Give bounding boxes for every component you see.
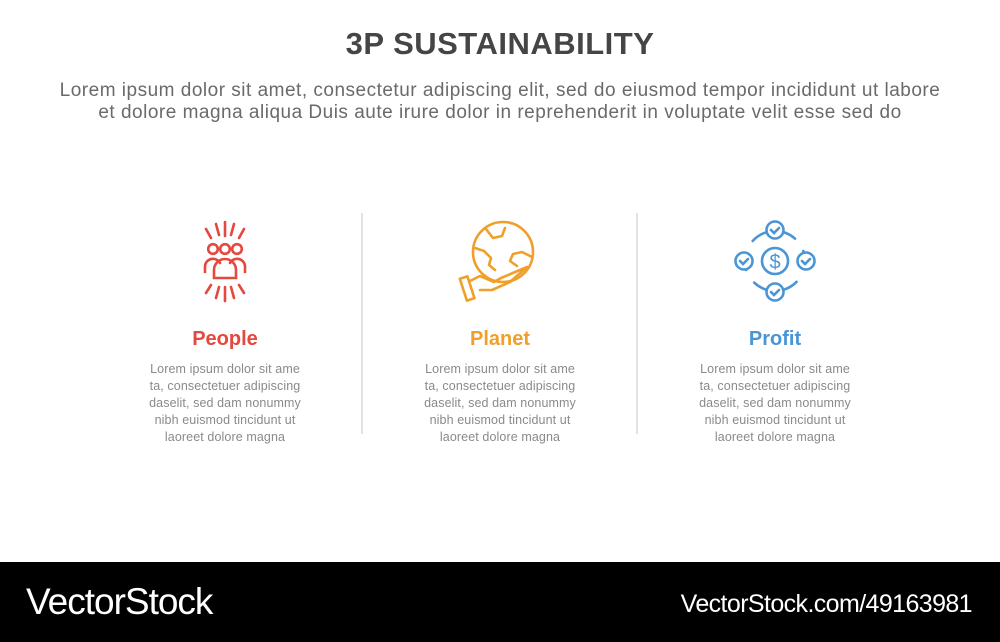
label: Profit <box>749 328 801 350</box>
text: daselit, sed dam nonummy <box>424 396 576 410</box>
text: laoreet dolore magna <box>715 430 835 444</box>
label: People <box>192 328 258 350</box>
text: daselit, sed dam nonummy <box>699 396 851 410</box>
text: laoreet dolore magna <box>165 430 285 444</box>
text: daselit, sed dam nonummy <box>149 396 301 410</box>
text <box>424 362 576 444</box>
text <box>699 362 851 444</box>
text: nibh euismod tincidunt ut <box>430 413 570 427</box>
text: ta, consectetuer adipiscing <box>700 379 850 393</box>
text: Lorem ipsum dolor sit ame <box>700 362 850 376</box>
title: 3P SUSTAINABILITY <box>346 26 654 61</box>
panel: planet <box>424 220 576 444</box>
label: Planet <box>470 328 530 350</box>
footer url: VectorStock.com/49163981 <box>681 590 972 618</box>
panel: profit <box>699 220 851 444</box>
text: nibh euismod tincidunt ut <box>705 413 845 427</box>
icon: people <box>204 220 246 302</box>
icon: profit <box>734 220 816 302</box>
footer <box>0 562 1000 642</box>
text: ta, consectetuer adipiscing <box>425 379 575 393</box>
text: ta, consectetuer adipiscing <box>150 379 300 393</box>
subtitle: Lorem ipsum dolor sit amet, consectetur adipiscing elit, sed do eiusmod tempor incididunt ut labore <box>60 80 940 101</box>
subtitle <box>60 80 940 123</box>
text: Lorem ipsum dolor sit ame <box>425 362 575 376</box>
icon: profit: $ <box>769 252 781 274</box>
icon: planet <box>458 220 534 302</box>
footer logo: VectorStock <box>26 581 212 622</box>
text: Lorem ipsum dolor sit ame <box>150 362 300 376</box>
subtitle: et dolore magna aliqua Duis aute irure dolor in reprehenderit in voluptate velit esse sed do <box>98 102 902 123</box>
panel: people <box>149 220 301 444</box>
text <box>149 362 301 444</box>
text: nibh euismod tincidunt ut <box>155 413 295 427</box>
text: laoreet dolore magna <box>440 430 560 444</box>
